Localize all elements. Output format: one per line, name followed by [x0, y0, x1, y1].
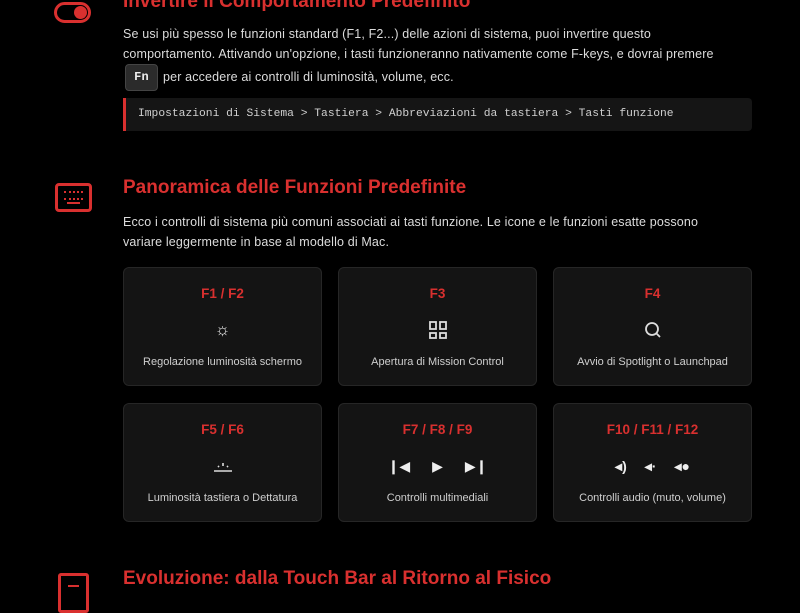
- card: F7/F8/F9: ▶❙: [465, 458, 487, 474]
- card: F4: Avvio di Spotlight o Launchpad: [577, 356, 728, 368]
- card: F10/F11/F12: F10 / F11 / F12: [607, 422, 698, 437]
- text: invertire paragraph: Se usi più spesso le funzioni standard (F1, F2...) delle azioni di sistema, puoi invertire questo: [123, 27, 651, 41]
- card: F3: [338, 267, 537, 386]
- text: invertire paragraph: comportamento. Attivando un'opzione, i tasti funzioneranno nativamente come F-keys, e dovrai premere: [123, 47, 714, 61]
- card: F7/F8/F9: F7 / F8 / F9: [403, 422, 472, 437]
- text: panoramica intro: Ecco i controlli di sistema più comuni associati ai tasti funzione. Le icone e le funzioni esatte possono: [123, 215, 698, 229]
- card: F3: F3: [430, 286, 445, 301]
- card: F10/F11/F12: [553, 403, 752, 522]
- card: F7/F8/F9: ▶: [432, 458, 443, 474]
- text: invertire paragraph: per accedere ai controlli di luminosità, volume, ecc.: [163, 70, 454, 84]
- card: F1/F2: ☼: [215, 320, 230, 339]
- card: F4: [553, 267, 752, 386]
- card: F10/F11/F12: ◂): [615, 458, 627, 474]
- card: F7/F8/F9: ❙◀: [388, 458, 410, 474]
- card: F1/F2: Regolazione luminosità schermo: [143, 356, 302, 368]
- code block: path: [123, 98, 752, 131]
- heading: panoramica: Panoramica delle Funzioni Predefinite: [123, 177, 466, 198]
- icon: touch bar: [58, 573, 89, 613]
- code block: path: Impostazioni di Sistema > Tastiera > Abbreviazioni da tastiera > Tasti funzione: [138, 108, 674, 120]
- card: F7/F8/F9: [338, 403, 537, 522]
- icon: keyboard: [55, 183, 92, 212]
- card: F1/F2: F1 / F2: [201, 286, 244, 301]
- card: F10/F11/F12: ◂·: [645, 458, 656, 474]
- text: panoramica intro: [123, 215, 698, 249]
- card: F4: F4: [645, 286, 660, 301]
- card: F5/F6: [123, 403, 322, 522]
- text: panoramica intro: variare leggermente in base al modello di Mac.: [123, 235, 389, 249]
- text: invertire paragraph: [123, 27, 714, 91]
- card: F5/F6: F5 / F6: [201, 422, 244, 437]
- card: F7/F8/F9: Controlli multimediali: [387, 492, 488, 504]
- text: invertire paragraph: Fn: [134, 70, 149, 84]
- heading: evoluzione: Evoluzione: dalla Touch Bar al Ritorno al Fisico: [123, 568, 551, 589]
- card: F3: Apertura di Mission Control: [371, 356, 504, 368]
- card: F10/F11/F12: ◂●: [674, 458, 690, 474]
- card: F5/F6: Luminosità tastiera o Dettatura: [148, 492, 297, 504]
- card: F10/F11/F12: Controlli audio (muto, volume): [579, 492, 726, 504]
- card: F1/F2: [123, 267, 322, 386]
- icon: toggle: [54, 2, 91, 23]
